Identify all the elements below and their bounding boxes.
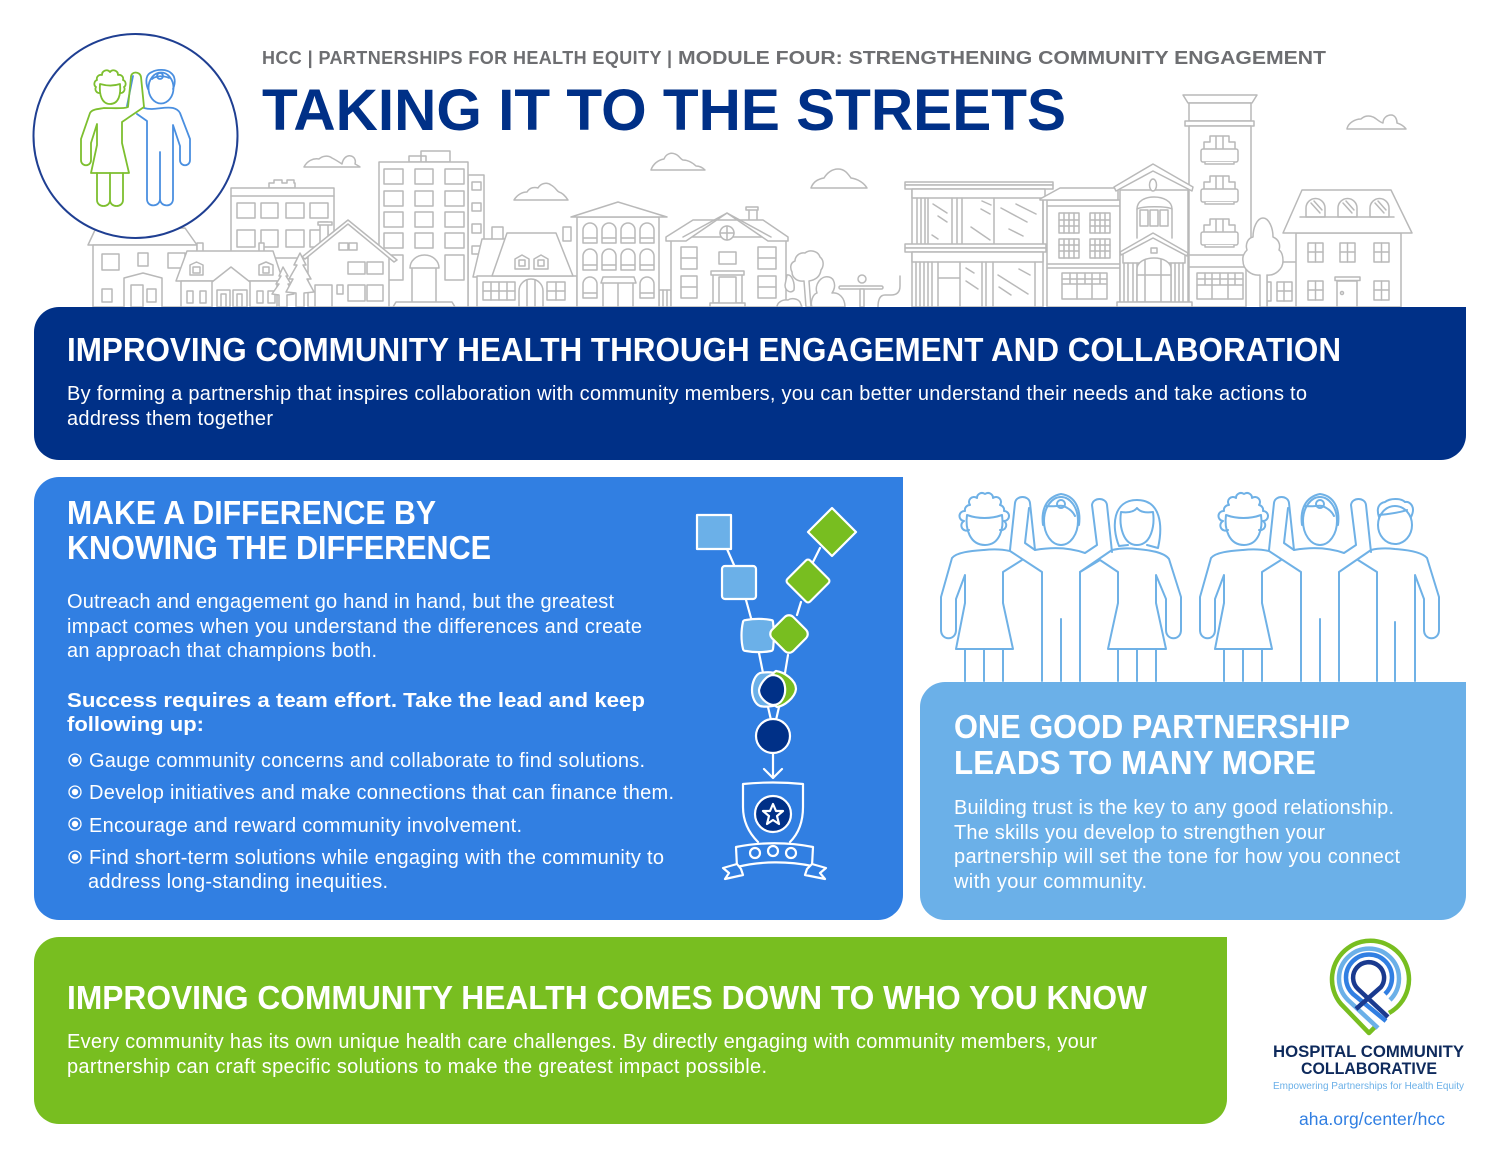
header circle with two high-fiving people <box>34 34 238 238</box>
bold lead-in <box>67 690 645 736</box>
panel: improving community health <box>34 307 1466 460</box>
intro text: Outreach and engagement go hand in hand, but the greatest <box>67 591 614 613</box>
bullet list: Encourage and reward community involvement. <box>89 815 522 837</box>
heading: IMPROVING COMMUNITY HEALTH COMES DOWN TO WHO YOU KNOW <box>67 979 1148 1016</box>
bullet list: Find short-term solutions while engaging with the community to <box>89 847 664 869</box>
intro text: impact comes when you understand the differences and create <box>67 616 642 638</box>
building: small connector <box>1267 262 1297 307</box>
skyline illustration <box>88 95 1412 307</box>
bullet list <box>69 750 674 893</box>
heading: ONE GOOD PARTNERSHIP <box>954 708 1350 745</box>
icon: round tree <box>1243 218 1283 307</box>
logo wordmark: Empowering Partnerships for Health Equity <box>1273 1080 1465 1092</box>
house: dormers <box>176 243 283 307</box>
icon: ribbon map pin <box>1332 941 1409 1033</box>
cloud: above low-rise <box>304 156 360 167</box>
cloud: centre left <box>514 183 568 200</box>
heading: IMPROVING COMMUNITY HEALTH THROUGH ENGAGEMENT AND COLLABORATION <box>67 331 1341 368</box>
intro text: an approach that champions both. <box>67 640 377 662</box>
building: flat apartment block <box>231 180 334 258</box>
building: shop block <box>1040 188 1120 307</box>
logo wordmark: COLLABORATIVE <box>1301 1060 1437 1078</box>
body text: Every community has its own unique health care challenges. By directly engaging with community members, your <box>67 1031 1097 1053</box>
body text: with your community. <box>953 871 1147 893</box>
body text: By forming a partnership that inspires collaboration with community members, you can better understand their needs and take actions to <box>67 383 1307 405</box>
bold lead-in: following up: <box>67 714 204 736</box>
bullet list: Develop initiatives and make connections that can finance them. <box>89 782 674 804</box>
body text <box>953 797 1400 893</box>
icon: blue person <box>127 70 190 205</box>
heading: MAKE A DIFFERENCE BY <box>67 494 436 531</box>
header kicker: HCC | PARTNERSHIPS FOR HEALTH EQUITY | <box>262 48 672 68</box>
cloud: centre right <box>811 169 867 188</box>
icon: pine trees <box>272 253 314 307</box>
building: clock tower <box>1183 95 1257 307</box>
body text: Building trust is the key to any good relationship. <box>954 797 1394 819</box>
logo wordmark: HOSPITAL COMMUNITY <box>1273 1043 1464 1061</box>
panel: make a difference <box>34 477 903 920</box>
heading <box>67 494 491 566</box>
body text <box>67 383 1307 430</box>
website link: aha.org/center/hcc <box>1299 1109 1445 1129</box>
house: mansard <box>473 227 577 307</box>
person six <box>1358 499 1439 681</box>
header kicker <box>262 48 1326 68</box>
body text: address them together <box>67 408 273 430</box>
bold lead-in: Success requires a team effort. Take the lead and keep <box>67 690 645 712</box>
diagram: shapes converging into badge <box>697 508 856 879</box>
building: modern glass <box>905 182 1053 307</box>
house: mansard with arched dormers <box>1283 190 1412 307</box>
building: arched windows <box>571 202 671 307</box>
heading: KNOWING THE DIFFERENCE <box>67 529 491 566</box>
icon: green person <box>81 70 144 206</box>
heading: LEADS TO MANY MORE <box>954 744 1316 781</box>
logo wordmark <box>1273 1043 1465 1092</box>
house: large gable <box>302 220 397 307</box>
bullet list: address long-standing inequities. <box>88 871 388 893</box>
house: round window <box>666 207 788 307</box>
body text <box>67 1031 1097 1078</box>
building: tall block <box>379 151 484 307</box>
body text: partnership will set the tone for how you connect <box>954 846 1400 868</box>
person one <box>941 493 1022 681</box>
icon: cafe table and chair <box>839 275 900 307</box>
bullet list: Gauge community concerns and collaborate to find solutions. <box>89 750 645 772</box>
person four <box>1200 493 1281 681</box>
header kicker: MODULE FOUR: STRENGTHENING COMMUNITY ENGAGEMENT <box>678 48 1326 68</box>
cloud: upper right <box>1347 115 1406 129</box>
person two <box>1010 494 1112 681</box>
title: TAKING IT TO THE STREETS <box>262 78 1066 143</box>
panel: who you know <box>34 937 1227 1124</box>
illustration: group of people with raised hands <box>941 493 1439 681</box>
person five <box>1269 494 1371 681</box>
person three <box>1080 500 1181 681</box>
icon: trees and shrubs <box>777 251 845 307</box>
logo: hospital community collaborative <box>1273 941 1465 1129</box>
cloud: centre <box>651 153 705 170</box>
house: far left <box>88 228 197 307</box>
body text: partnership can craft specific solutions to make the greatest impact possible. <box>67 1056 767 1078</box>
heading <box>954 708 1350 781</box>
body text: The skills you develop to strengthen your <box>954 822 1325 844</box>
building: central gabled entrance <box>1114 164 1193 307</box>
intro text <box>67 591 642 662</box>
panel: one good partnership <box>920 682 1466 920</box>
